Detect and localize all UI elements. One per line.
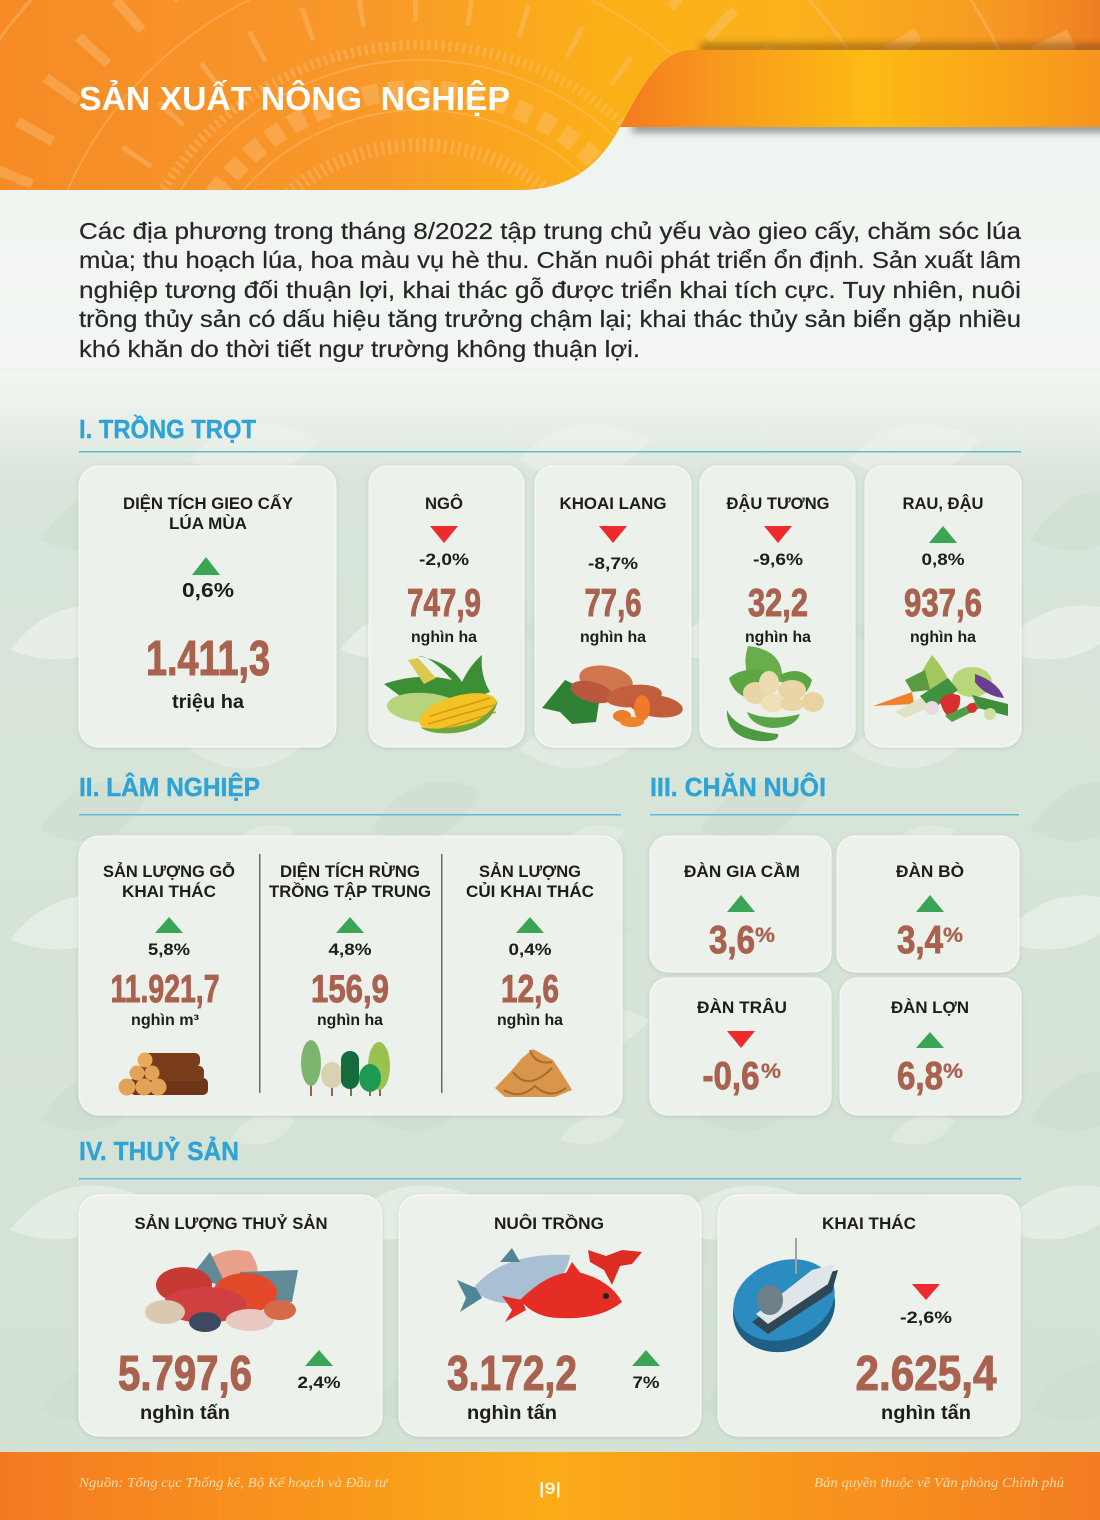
stat: sản lượng củi: 12,6 bbox=[501, 968, 559, 1011]
panel: ngô: NGÔ bbox=[425, 494, 463, 513]
icon: vegetables bbox=[873, 655, 1008, 722]
stat: diện tích rừng: TRỒNG TẬP TRUNG bbox=[269, 882, 431, 901]
panel: khoai lang: KHOAI LANG bbox=[560, 494, 666, 513]
stat: sản lượng củi: SẢN LƯỢNG bbox=[479, 862, 581, 881]
panel: rau, đậu: RAU, ĐẬU bbox=[902, 494, 984, 513]
panel: nuôi trồng bbox=[399, 1195, 701, 1436]
panel: đàn gia cầm: ĐÀN GIA CẦM bbox=[684, 862, 800, 881]
panel: đàn trâu: % bbox=[761, 1060, 781, 1083]
panel: đàn gia cầm bbox=[650, 836, 831, 972]
panel: diện tích gieo cấy lúa mùa: LÚA MÙA bbox=[169, 514, 247, 533]
panel: khoai lang: -8,7% bbox=[588, 554, 638, 573]
stat: diện tích rừng: 4,8% bbox=[328, 940, 372, 959]
footer bar: Bản quyền thuộc về Văn phòng Chính phủ bbox=[814, 1476, 1064, 1491]
icon: sweet potato bbox=[542, 662, 684, 727]
panel: khai thác: 2.625,4 bbox=[856, 1347, 996, 1401]
stat: sản lượng gỗ: 11.921,7 bbox=[110, 968, 220, 1011]
footer bar: |9| bbox=[539, 1479, 561, 1498]
footer bar: Nguồn: Tổng cục Thống kê, Bộ Kế hoạch và Đầu tư bbox=[78, 1476, 388, 1491]
stat: sản lượng gỗ: 5,8% bbox=[148, 940, 190, 959]
stat: sản lượng củi bbox=[466, 862, 594, 1029]
stat: diện tích rừng: nghìn ha bbox=[317, 1012, 383, 1029]
panel: đàn lợn bbox=[840, 978, 1021, 1115]
intro paragraph: khó khăn do thời tiết ngư trường không thuận lợi. bbox=[79, 336, 640, 362]
panel: diện tích gieo cấy lúa mùa: 0,6% bbox=[182, 580, 234, 602]
intro paragraph: Các địa phương trong tháng 8/2022 tập trung chủ yếu vào gieo cấy, chăm sóc lúa bbox=[79, 218, 1021, 244]
panel: nuôi trồng: 3.172,2 bbox=[447, 1347, 577, 1401]
panel: ngô: 747,9 bbox=[407, 582, 481, 625]
panel: khai thác bbox=[718, 1195, 1020, 1436]
icon: trees bbox=[301, 1040, 390, 1096]
panel: đậu tương: nghìn ha bbox=[745, 629, 811, 646]
icon: fish and lobster bbox=[457, 1248, 642, 1322]
panel: khai thác: KHAI THÁC bbox=[822, 1214, 916, 1233]
panel: sản lượng thuỷ sản: SẢN LƯỢNG THUỶ SẢN bbox=[134, 1214, 328, 1233]
heading: IV. Thuỷ sản: IV. THUỶ SẢN bbox=[79, 1136, 239, 1166]
panel: ngô bbox=[369, 466, 524, 747]
header banner with drum pattern bbox=[0, 0, 1100, 190]
panel: rau, đậu bbox=[865, 466, 1021, 747]
panel: diện tích gieo cấy lúa mùa: triệu ha bbox=[172, 692, 244, 713]
heading: I. Trồng trọt: I. TRỒNG TRỌT bbox=[79, 414, 256, 444]
panel: sản lượng thuỷ sản: 5.797,6 bbox=[118, 1347, 252, 1401]
intro paragraph: trồng thủy sản có dấu hiệu tăng trưởng chậm lại; khai thác thủy sản biển gặp nhiều bbox=[79, 306, 1021, 332]
panel: đàn bò bbox=[837, 836, 1019, 972]
stat: sản lượng gỗ bbox=[103, 862, 235, 1029]
panel: đàn bò: ĐÀN BÒ bbox=[896, 862, 964, 881]
intro paragraph: mùa; thu hoạch lúa, hoa màu vụ hè thu. Chăn nuôi phát triển ổn định. Sản xuất lâm bbox=[79, 247, 1021, 273]
panel: sản lượng thuỷ sản: nghìn tấn bbox=[140, 1403, 230, 1424]
intro paragraph bbox=[79, 218, 1021, 362]
icon: logs bbox=[118, 1052, 208, 1096]
stat: sản lượng củi: CỦI KHAI THÁC bbox=[466, 882, 594, 901]
panel: khai thác: -2,6% bbox=[900, 1308, 952, 1327]
panel: đậu tương bbox=[700, 466, 855, 747]
panel: đàn gia cầm: 3,6 bbox=[709, 919, 755, 962]
panel: rau, đậu: 937,6 bbox=[904, 582, 982, 625]
panel: khoai lang bbox=[535, 466, 691, 747]
panel: lâm nghiệp bbox=[79, 836, 622, 1115]
panel: đàn trâu: ĐÀN TRÂU bbox=[697, 998, 787, 1017]
stat: diện tích rừng bbox=[269, 862, 431, 1029]
stat: sản lượng củi: nghìn ha bbox=[497, 1012, 563, 1029]
icon: seafood bbox=[145, 1250, 298, 1332]
panel: đàn trâu bbox=[650, 978, 831, 1115]
panel: đậu tương: ĐẬU TƯƠNG bbox=[726, 494, 830, 513]
footer bar bbox=[0, 1452, 1100, 1520]
panel: đàn lợn: % bbox=[943, 1060, 963, 1083]
stat: sản lượng củi: 0,4% bbox=[508, 940, 552, 959]
panel: khai thác: nghìn tấn bbox=[881, 1403, 971, 1424]
panel: diện tích gieo cấy lúa mùa: 1.411,3 bbox=[146, 632, 270, 686]
panel: sản lượng thuỷ sản bbox=[79, 1195, 382, 1436]
panel: diện tích gieo cấy lúa mùa bbox=[79, 466, 336, 747]
panel: khoai lang: nghìn ha bbox=[580, 629, 646, 646]
title: SẢN XUẤT NÔNG NGHIỆP bbox=[79, 79, 510, 117]
icon: corn bbox=[384, 655, 501, 738]
heading: II. Lâm nghiệp: II. LÂM NGHIỆP bbox=[79, 772, 260, 802]
panel: đàn lợn: ĐÀN LỢN bbox=[891, 998, 969, 1017]
stat: diện tích rừng: 156,9 bbox=[311, 968, 389, 1011]
header ribbon bbox=[620, 44, 1100, 132]
heading: III. Chăn nuôi: III. CHĂN NUÔI bbox=[650, 772, 826, 802]
panel: đàn bò: 3,4 bbox=[897, 919, 943, 962]
intro paragraph: nghiệp tương đối thuận lợi, khai thác gỗ được triển khai tích cực. Tuy nhiên, nuôi bbox=[79, 277, 1021, 303]
panel: rau, đậu: nghìn ha bbox=[910, 629, 976, 646]
panel: khoai lang: 77,6 bbox=[584, 582, 642, 625]
panel: nuôi trồng: 7% bbox=[632, 1373, 660, 1392]
panel: đàn lợn: 6,8 bbox=[897, 1055, 943, 1098]
panel: sản lượng thuỷ sản: 2,4% bbox=[298, 1373, 340, 1392]
panel: nuôi trồng: nghìn tấn bbox=[467, 1403, 557, 1424]
panel: ngô: -2,0% bbox=[419, 550, 469, 569]
stat: sản lượng gỗ: nghìn m³ bbox=[131, 1012, 199, 1029]
icon: firewood bbox=[495, 1049, 572, 1097]
panel: ngô: nghìn ha bbox=[411, 629, 477, 646]
stat: sản lượng gỗ: SẢN LƯỢNG GỖ bbox=[103, 862, 235, 881]
panel: rau, đậu: 0,8% bbox=[922, 550, 964, 569]
panel: đậu tương: 32,2 bbox=[748, 582, 808, 625]
panel: nuôi trồng: NUÔI TRỒNG bbox=[494, 1214, 604, 1233]
panel: đàn bò: % bbox=[943, 924, 963, 947]
panel: diện tích gieo cấy lúa mùa: DIỆN TÍCH GIEO CẤY bbox=[123, 494, 294, 513]
icon: soybeans bbox=[727, 646, 824, 741]
stat: diện tích rừng: DIỆN TÍCH RỪNG bbox=[280, 862, 420, 881]
panel: đàn trâu: -0,6 bbox=[702, 1055, 760, 1098]
icon: fishing boat bbox=[720, 1238, 848, 1366]
panel: đậu tương: -9,6% bbox=[753, 550, 803, 569]
panel: đàn gia cầm: % bbox=[755, 924, 775, 947]
stat: sản lượng gỗ: KHAI THÁC bbox=[122, 882, 216, 901]
